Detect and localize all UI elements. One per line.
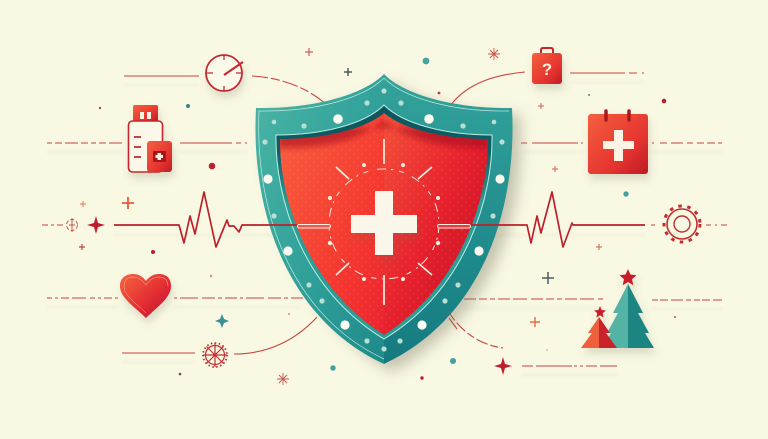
shield rivets: [262, 88, 505, 352]
ring sparkles: [328, 163, 440, 281]
line reflections: [47, 82, 722, 375]
asterisk marks: [277, 48, 500, 385]
heartbeat line right: [471, 192, 645, 247]
shield: [255, 74, 513, 364]
dots: [99, 58, 676, 380]
icon: heart: [120, 274, 171, 318]
target ring: [298, 139, 470, 305]
connector lines: [42, 72, 727, 366]
teal tree: [602, 284, 654, 348]
icon: trees: [581, 269, 654, 348]
icon: calendar with cross: [588, 111, 648, 174]
infographic canvas: [42, 47, 727, 385]
icon: small compass mark: [66, 218, 78, 232]
icon: ship wheel: [203, 343, 227, 367]
shield rim: [255, 74, 513, 364]
icon: first aid case with question mark: ?: [542, 60, 552, 79]
icon: first aid case with question mark: [532, 48, 562, 84]
white cross: [351, 191, 417, 255]
icon: medicine bottle: [128, 105, 172, 172]
heartbeat line left: [114, 192, 297, 247]
icon: gear: [664, 206, 700, 242]
shield red field: [278, 105, 490, 337]
plus marks: [79, 48, 602, 327]
shield shadow: [264, 82, 521, 372]
tree stars: [594, 269, 636, 318]
red tree: [581, 317, 617, 348]
sparkles: [87, 216, 512, 375]
icon: clock: [206, 55, 243, 91]
